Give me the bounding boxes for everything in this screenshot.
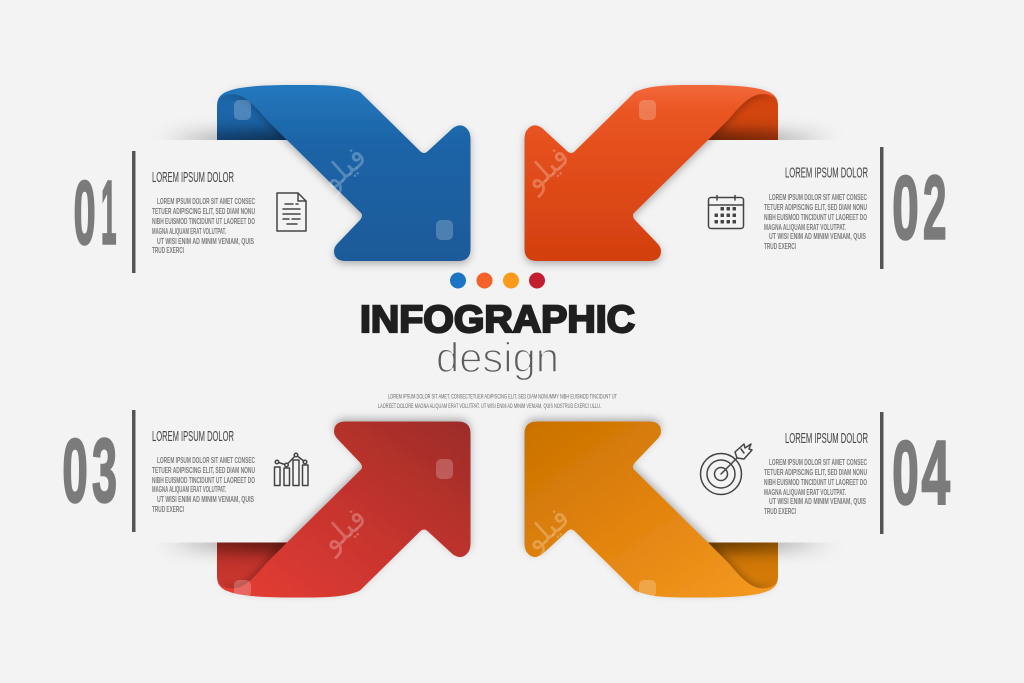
step 01 body text: TRUD EXERCI: [152, 245, 184, 255]
step 04 divider: [880, 412, 884, 534]
step 02 body text: NIBH EUISMOD TINCIDUNT UT LAOREET DO: [764, 212, 867, 222]
step 02 body text: TETUER ADIPISCING ELIT, SED DIAM NONU: [764, 202, 867, 212]
icon: document: [277, 193, 306, 231]
icon: calendar: [708, 196, 744, 228]
step 02 body text: UT WISI ENIM AD MINIM VENIAM, QUIS: [769, 231, 866, 241]
panel: step 03 red arrow: [125, 404, 470, 598]
step 01 body text: MAGNA ALIQUAM ERAT VOLUTPAT.: [152, 226, 226, 236]
panel: step 01 blue arrow: [125, 85, 470, 278]
step 04 number: 4: [922, 424, 950, 524]
step 03 heading: LOREM IPSUM DOLOR: [152, 428, 234, 445]
step 03 body text: LOREM IPSUM DOLOR SIT AMET CONSEC: [157, 455, 255, 465]
step 03 body text: TETUER ADIPISCING ELIT, SED DIAM NONU: [152, 465, 255, 475]
step 02 body text: [764, 192, 867, 251]
text: 2: [923, 158, 946, 258]
step 04 body text: TETUER ADIPISCING ELIT, SED DIAM NONU: [764, 467, 867, 477]
icon: bar chart: [274, 453, 308, 486]
step 04 heading: LOREM IPSUM DOLOR: [785, 430, 868, 447]
title: INFOGRAPHIC: [360, 299, 635, 341]
step 03 number: 0: [62, 422, 88, 522]
step 01 body text: TETUER ADIPISCING ELIT, SED DIAM NONU: [152, 206, 255, 216]
panel: step 02 orange-red arrow: [524, 85, 870, 278]
text: 1: [101, 164, 116, 264]
text: 3: [92, 422, 117, 522]
step 03 body text: UT WISI ENIM AD MINIM VENIAM, QUIS: [157, 494, 254, 504]
step 04 number: 0: [892, 424, 919, 524]
step 04 body text: LOREM IPSUM DOLOR SIT AMET CONSEC: [769, 457, 867, 467]
watermarks: فيلو: [312, 500, 374, 560]
step 02 number: 0: [892, 158, 919, 258]
watermarks: فيلو: [312, 139, 374, 199]
intro text: [378, 394, 617, 410]
step 01 divider: [132, 151, 136, 273]
step 04 body text: TRUD EXERCI: [764, 506, 796, 516]
step 01 body text: LOREM IPSUM DOLOR SIT AMET CONSEC: [157, 196, 255, 206]
step 04 body text: NIBH EUISMOD TINCIDUNT UT LAOREET DO: [764, 477, 867, 487]
step 03 divider: [132, 410, 136, 532]
intro text: LAOREET DOLORE MAGNA ALIQUAM ERAT VOLUTPAT. UT WISI ENIM AD MINIM VENIAM, QUIS NOSTRUD EXERCI ULLU.: [378, 403, 601, 410]
step 01 body text: [152, 196, 255, 255]
step 02 body text: LOREM IPSUM DOLOR SIT AMET CONSEC: [769, 192, 867, 202]
step 01 body text: UT WISI ENIM AD MINIM VENIAM, QUIS: [157, 236, 254, 246]
step 02 body text: TRUD EXERCI: [764, 241, 796, 251]
watermarks: [234, 100, 656, 597]
subtitle: design: [436, 334, 559, 381]
icon: target with dart: [700, 444, 752, 494]
step 04 body text: [764, 457, 867, 516]
step 02 body text: MAGNA ALIQUAM ERAT VOLUTPAT.: [764, 222, 846, 232]
panel: step 04 amber arrow: [524, 404, 870, 598]
step 03 body text: [152, 455, 255, 514]
step 04 body text: UT WISI ENIM AD MINIM VENIAM, QUIS: [769, 496, 866, 506]
watermarks: فيلو: [515, 139, 577, 199]
step 03 body text: NIBH EUISMOD TINCIDUNT UT LAOREET DO: [152, 475, 255, 485]
step 01 number: 0: [74, 164, 96, 264]
step 02 divider: [880, 147, 884, 269]
step 04 body text: MAGNA ALIQUAM ERAT VOLUTPAT.: [764, 487, 846, 497]
step 03 body text: TRUD EXERCI: [152, 504, 184, 514]
step 03 body text: MAGNA ALIQUAM ERAT VOLUTPAT.: [152, 484, 226, 494]
color dots: [450, 272, 545, 288]
step 02 heading: LOREM IPSUM DOLOR: [785, 164, 868, 182]
step 01 heading: LOREM IPSUM DOLOR: [152, 169, 234, 186]
step 01 body text: NIBH EUISMOD TINCIDUNT UT LAOREET DO: [152, 216, 255, 226]
watermarks: فيلو: [515, 500, 577, 560]
intro text: LOREM IPSUM DOLOR SIT AMET, CONSECTETUER ADIPISCING ELIT, SED DIAM NONUMMY NIBH EUISMOD TINCIDUNT UT: [388, 394, 617, 400]
